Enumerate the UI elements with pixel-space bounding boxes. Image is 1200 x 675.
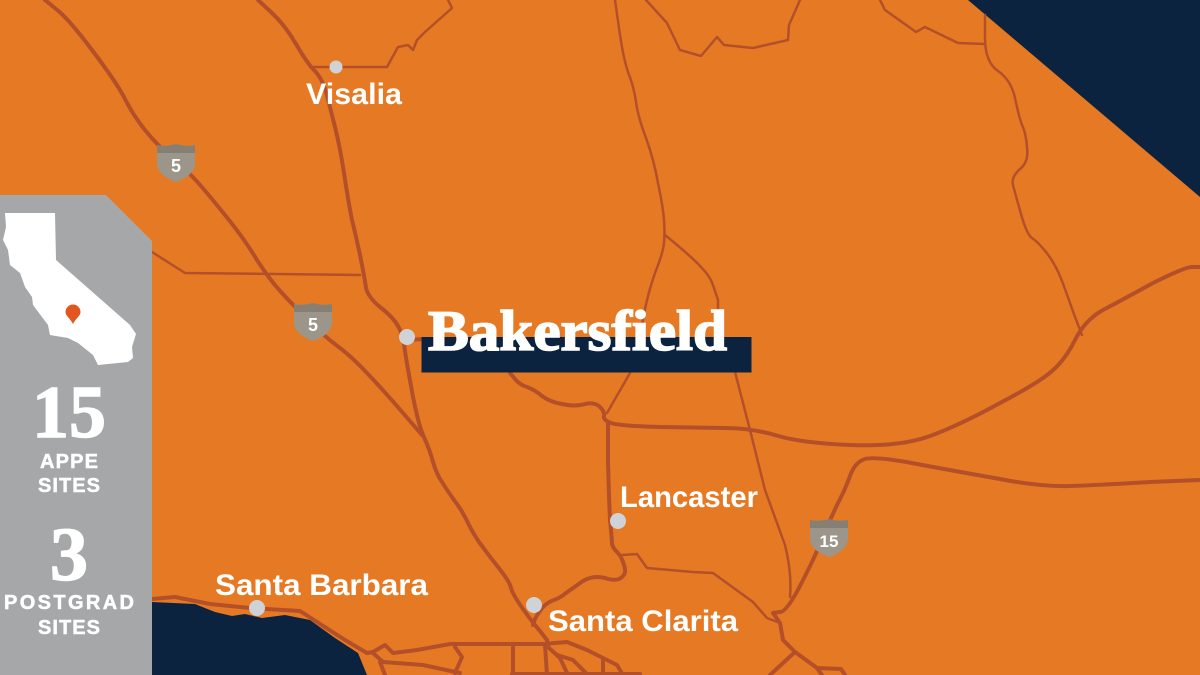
panel: site statistics bbox=[0, 195, 152, 675]
icon: interstate 5 shield south bbox=[294, 303, 332, 341]
label: SITES: SITES bbox=[38, 475, 100, 497]
icon: location pin bbox=[66, 305, 80, 324]
label: Visalia: Visalia bbox=[306, 78, 402, 111]
icon: interstate 15 shield bbox=[810, 519, 848, 557]
marker: Visalia bbox=[330, 60, 342, 74]
label: APPE: APPE bbox=[40, 451, 98, 473]
icon: interstate 5 shield north bbox=[157, 144, 195, 182]
icon: interstate 5 shield north: 5 bbox=[171, 156, 181, 176]
stat: 3: 3 bbox=[50, 513, 88, 597]
icon: interstate 15 shield: 15 bbox=[820, 532, 838, 551]
icon: interstate 5 shield south: 5 bbox=[308, 315, 318, 335]
label: Lancaster: Lancaster bbox=[620, 481, 758, 514]
ocean bbox=[152, 602, 367, 675]
marker: Lancaster bbox=[610, 513, 626, 529]
highlight bar behind Bakersfield bbox=[422, 337, 752, 372]
marker: Santa Clarita bbox=[526, 597, 542, 613]
title: Bakersfield: Bakersfield bbox=[428, 300, 727, 363]
navy corner outside the state bbox=[968, 0, 1200, 197]
stat: 15: 15 bbox=[32, 372, 106, 454]
marker: Bakersfield bbox=[399, 329, 415, 345]
label: Santa Clarita: Santa Clarita bbox=[548, 605, 738, 638]
icon: California state outline bbox=[3, 213, 136, 365]
panel background bbox=[0, 195, 152, 675]
label: SITES: SITES bbox=[38, 617, 100, 639]
label: POSTGRAD: POSTGRAD bbox=[4, 592, 134, 614]
marker: Santa Barbara bbox=[249, 600, 265, 616]
label: Santa Barbara: Santa Barbara bbox=[215, 569, 428, 602]
